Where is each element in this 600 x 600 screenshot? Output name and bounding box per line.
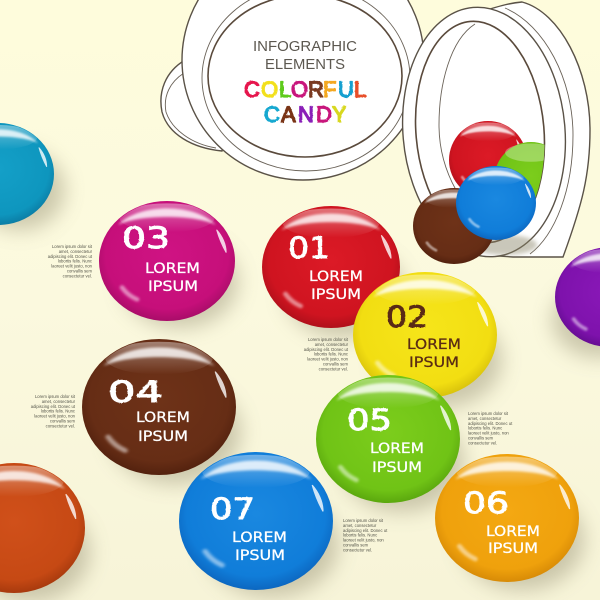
candy 03 [99,201,235,321]
text block 07 [343,518,388,552]
candy 01: IPSUM [311,287,361,303]
candy 07: LOREM [232,530,287,546]
title: colorful candy: C [264,102,280,127]
text block 03: lobortis felis. Nunc [58,259,92,264]
candy: red in jar [449,121,527,199]
candy: brown in jar [413,188,495,264]
text block 03: adipiscing elit. Donec ut [48,254,93,259]
title: colorful candy: U [338,77,354,102]
text block 07: Lorem ipsum dolor sit [343,518,384,523]
text block 04: consectetur vel. [46,423,75,428]
candy 05: LOREM [370,441,424,457]
text block 07: consectetur vel. [343,547,372,552]
candy 06: LOREM [486,524,540,540]
candy 05: IPSUM [372,460,422,476]
title: infographic elements: ELEMENTS [265,57,345,73]
candy shadows [0,150,600,600]
text block 04: Lorem ipsum dolor sit [35,394,76,399]
candy 03: 03 [122,221,170,255]
text block 01: Lorem ipsum dolor sit [308,337,349,342]
candy 06: 06 [463,486,509,520]
candy 04: 04 [108,375,163,409]
text block 03: laoreet velit justo, non [51,264,93,269]
text block 04: lobortis felis. Nunc [41,409,75,414]
candy 02: IPSUM [409,355,459,371]
candy 02 [353,272,497,398]
text block 07: adipiscing elit. Donec ut [343,528,388,533]
text block 01 [304,337,349,371]
candy 04: IPSUM [138,429,188,445]
title: colorful candy [244,77,366,127]
text block 03: amet, consectetur [59,249,93,254]
candy 05: 05 [347,403,392,437]
candy 07: 07 [210,492,255,526]
text block 03: consectetur vel. [63,273,92,278]
title: colorful candy: C [244,77,260,102]
candy 05 [316,375,460,503]
candy 07 [179,452,333,590]
text block 04: adipiscing elit. Donec ut [31,404,76,409]
candy 07: IPSUM [235,548,285,564]
text block 07: laoreet velit justo, non [343,538,384,543]
candy 04: LOREM [136,410,190,426]
title: colorful candy: R [308,77,324,102]
candy 03: IPSUM [148,279,198,295]
title: colorful candy: A [281,102,296,127]
candy: blue in jar [456,166,536,240]
candy: rust edge [0,463,85,593]
candy: purple edge [555,247,600,347]
text block 05: lobortis felis. Nunc [468,426,502,431]
text block 01: laoreet velit justo, non [307,357,349,362]
title: colorful candy: L [279,77,291,102]
candy 01: LOREM [309,269,363,285]
text block 03: convallis sem [67,268,93,274]
title: colorful candy: O [291,77,308,102]
text block 05: convallis sem [468,436,494,440]
title: colorful candy: D [316,102,332,127]
title: colorful candy: L [354,77,366,102]
text block 05 [468,411,513,445]
text block 01: adipiscing elit. Donec ut [304,347,349,352]
text block 04: convallis sem [50,418,76,424]
text block 01: amet, consectetur [315,342,349,347]
title: colorful candy: O [261,77,278,102]
candy: cyan edge [0,123,54,225]
text block 05: consectetur vel. [468,440,497,445]
text block 05: adipiscing elit. Donec ut [468,421,513,426]
lid: back piece [161,60,230,151]
text block 03: Lorem ipsum dolor sit [52,244,93,249]
text block 05: laoreet velit justo, non [468,431,509,436]
text block 07: lobortis felis. Nunc [343,533,377,538]
text block 04: laoreet velit justo, non [34,414,76,419]
candy 03: LOREM [145,261,200,277]
jar inner shadow [473,235,537,255]
text block 01: consectetur vel. [319,366,348,371]
candy 06 [435,454,579,582]
text block 01: lobortis felis. Nunc [314,352,348,357]
candy 02: LOREM [407,337,461,353]
text block 01: convallis sem [323,362,349,366]
title: colorful candy: F [323,77,336,102]
text block 04 [31,394,76,428]
text block 07: convallis sem [343,542,369,548]
title: infographic elements [253,39,357,73]
candy 01: 01 [288,231,330,265]
jar [392,0,590,264]
candy 02: 02 [386,300,428,334]
lid: front with title [182,0,424,180]
title: infographic elements: INFOGRAPHIC [253,39,357,55]
candy 04 [82,339,236,475]
text block 07: amet, consectetur [343,523,377,528]
text block 05: amet, consectetur [468,416,502,421]
text block 04: amet, consectetur [42,399,76,404]
text block 05: Lorem ipsum dolor sit [468,411,509,416]
candy 01 [262,206,400,328]
candy 06: IPSUM [488,541,538,557]
candy: green in jar [496,142,544,198]
title: colorful candy: Y [332,102,347,127]
title: colorful candy: N [298,102,314,127]
text block 03 [48,244,93,278]
